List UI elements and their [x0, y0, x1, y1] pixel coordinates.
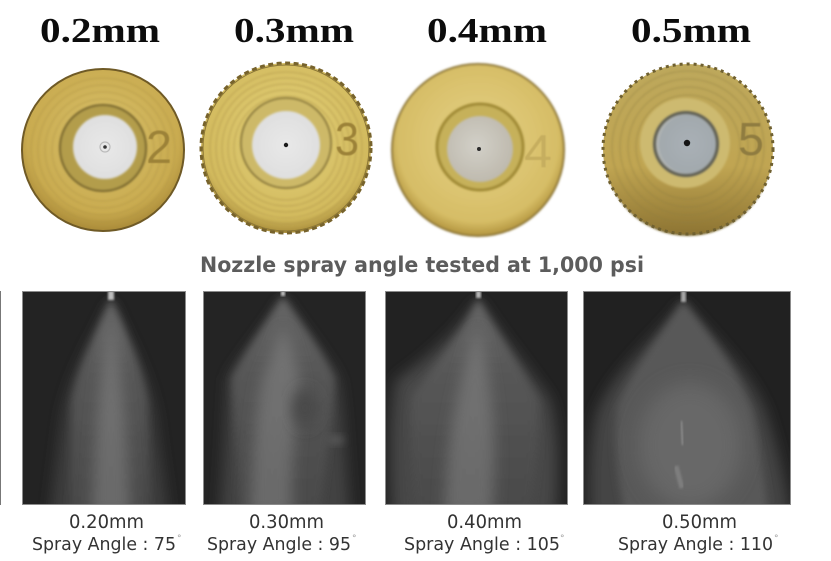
left edge sliver	[0, 291, 1, 505]
caption 0.50mm: 0.50mm	[662, 511, 737, 533]
caption 0.30mm: 0.30mm	[249, 511, 324, 533]
spray photo 0.40mm	[385, 291, 568, 515]
caption 0.50mm: Spray Angle : 110	[618, 534, 773, 555]
caption 0.30mm: Spray Angle : 95	[207, 534, 351, 555]
heading: 0.4mm: 0.4mm	[427, 11, 547, 50]
nozzle 0.2mm: 2	[146, 121, 172, 173]
caption 0.40mm: °	[560, 534, 564, 544]
spray photo 0.50mm	[583, 291, 791, 515]
caption 0.40mm	[404, 511, 564, 555]
caption 0.20mm	[32, 511, 182, 555]
heading: 0.2mm: 0.2mm	[40, 11, 160, 50]
caption 0.20mm: °	[177, 534, 182, 544]
nozzle 0.2mm	[22, 69, 184, 231]
caption 0.50mm	[618, 511, 778, 555]
caption 0.20mm: Spray Angle : 75	[32, 534, 176, 555]
caption 0.40mm: Spray Angle : 105	[404, 534, 560, 555]
caption 0.30mm	[207, 511, 356, 555]
nozzle 0.5mm: 5	[738, 113, 764, 165]
caption 0.50mm: °	[774, 534, 778, 544]
spray photo 0.20mm	[22, 291, 186, 515]
heading: 0.5mm: 0.5mm	[631, 11, 751, 50]
nozzle 0.4mm: 4	[524, 125, 552, 177]
nozzle 0.3mm	[201, 63, 371, 233]
nozzle 0.5mm	[603, 64, 773, 236]
heading: 0.3mm: 0.3mm	[234, 11, 354, 50]
chart title: Nozzle spray angle tested at 1,000 psi	[200, 253, 644, 277]
caption 0.40mm: 0.40mm	[447, 511, 522, 533]
caption 0.30mm: °	[352, 534, 356, 544]
nozzle 0.3mm: 3	[335, 113, 359, 165]
spray photo 0.30mm	[203, 291, 366, 515]
nozzle 0.4mm	[392, 64, 564, 236]
caption 0.20mm: 0.20mm	[69, 511, 144, 533]
